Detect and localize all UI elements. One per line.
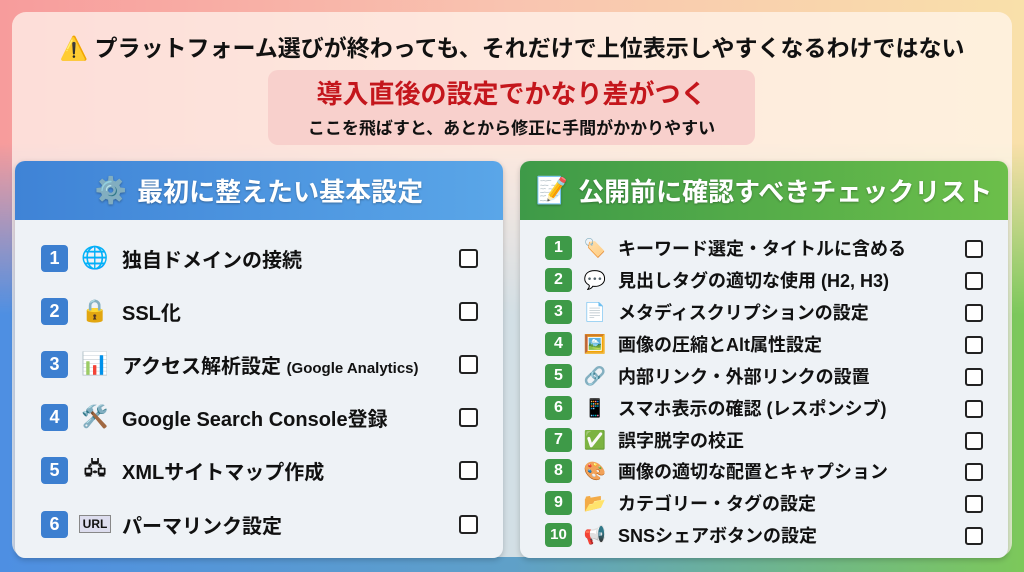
- list: checklist: 7: [554, 431, 563, 448]
- list: checklist: 📄: [584, 302, 606, 322]
- list: checklist: 3: [554, 303, 563, 320]
- list: basic settings: URL: [83, 517, 107, 531]
- list: checklist: 誤字脱字の校正: [618, 431, 744, 451]
- list: basic settings: 🛠️: [81, 404, 109, 429]
- list: checklist: 2: [554, 271, 563, 288]
- list: basic settings: 1: [49, 248, 60, 268]
- list: checklist: 1: [554, 239, 563, 256]
- list: basic settings: [41, 245, 478, 538]
- heading: checklist: [520, 161, 1008, 220]
- list: basic settings: XMLサイトマップ作成: [122, 462, 324, 484]
- list: checklist: キーワード選定・タイトルに含める: [618, 239, 906, 259]
- list: checklist: 🖼️: [584, 334, 606, 354]
- title: ⚠️ プラットフォーム選びが終わっても、それだけで上位表示しやすくなるわけではない: [59, 35, 965, 61]
- panel: basic settings: [15, 161, 503, 558]
- list: checklist: SNSシェアボタンの設定: [618, 526, 817, 546]
- list: basic settings: SSL化: [122, 302, 181, 324]
- heading: basic settings: 最初に整えたい基本設定: [137, 177, 423, 207]
- callout: [268, 70, 755, 145]
- list: checklist: 🎨: [584, 461, 606, 481]
- list: checklist: 💬: [584, 270, 606, 290]
- list: basic settings: パーマリンク設定: [122, 516, 282, 538]
- list: checklist: 9: [554, 494, 563, 511]
- list: checklist: 画像の圧縮とAlt属性設定: [618, 335, 822, 355]
- list: basic settings: Google Search Console登録: [122, 408, 388, 430]
- list: checklist: ✅: [584, 430, 606, 450]
- list: checklist: カテゴリー・タグの設定: [618, 494, 816, 514]
- list: checklist: スマホ表示の確認 (レスポンシブ): [618, 399, 886, 419]
- list: checklist: 📢: [584, 525, 606, 545]
- list: checklist: メタディスクリプションの設定: [618, 303, 869, 323]
- list: basic settings: 独自ドメインの接続: [122, 250, 302, 272]
- list: basic settings: 2: [49, 300, 60, 320]
- list: basic settings: 📊: [81, 351, 109, 376]
- list: checklist: 🔗: [584, 366, 606, 386]
- list: basic settings: アクセス解析設定 (Google Analytics): [122, 356, 419, 378]
- list: basic settings: 4: [49, 406, 60, 426]
- list: checklist: 5: [554, 367, 563, 384]
- heading: basic settings: ⚙️: [95, 175, 127, 205]
- callout: ここを飛ばすと、あとから修正に手間がかかりやすい: [308, 119, 715, 138]
- heading: basic settings: [15, 161, 503, 220]
- list: basic settings: 🌐: [81, 245, 109, 270]
- heading: checklist: 公開前に確認すべきチェックリスト: [578, 177, 992, 207]
- list: basic settings: 3: [49, 354, 60, 374]
- panel: checklist: [520, 161, 1008, 558]
- list: checklist: 画像の適切な配置とキャプション: [618, 462, 888, 482]
- list: checklist: 10: [550, 526, 567, 543]
- list: checklist: 🏷️: [584, 238, 606, 258]
- list: checklist: 内部リンク・外部リンクの設置: [618, 367, 870, 387]
- list: checklist: 📂: [584, 493, 606, 513]
- list: checklist: 見出しタグの適切な使用 (H2, H3): [618, 271, 889, 291]
- callout: 導入直後の設定でかなり差がつく: [316, 79, 706, 109]
- list: checklist: 6: [554, 399, 563, 416]
- list: checklist: [545, 236, 983, 547]
- heading: checklist: 📝: [536, 175, 568, 205]
- list: basic settings: 5: [49, 460, 60, 480]
- list: basic settings: 6: [49, 514, 60, 534]
- list: checklist: 8: [554, 462, 563, 479]
- list: checklist: 📱: [584, 398, 606, 418]
- list: checklist: 4: [554, 335, 563, 352]
- list: basic settings: 🔒: [81, 298, 109, 323]
